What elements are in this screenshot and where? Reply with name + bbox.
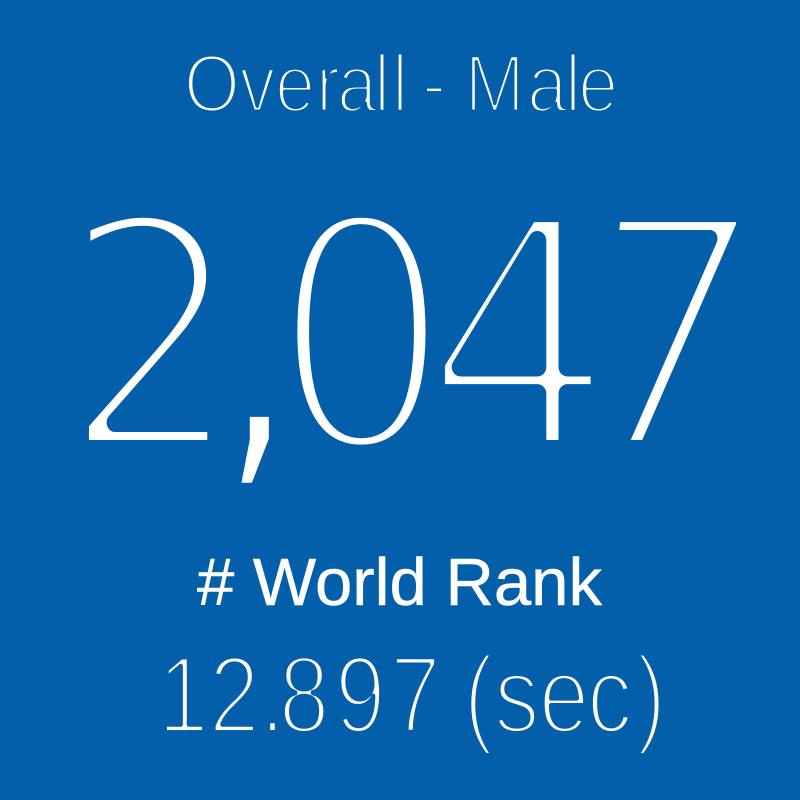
big number: world rank value: 7 [558, 148, 776, 527]
big number: world rank value: 0 [270, 149, 453, 527]
big number: world rank value: 4 [421, 148, 617, 527]
big number: world rank value: , [222, 178, 292, 521]
time value: 12.897 (sec) [158, 634, 666, 756]
title: Overall - Male [184, 38, 618, 130]
label: world rank: # World Rank [197, 545, 602, 620]
big number: world rank value [59, 148, 776, 527]
big number: world rank value: 2 [59, 148, 245, 526]
